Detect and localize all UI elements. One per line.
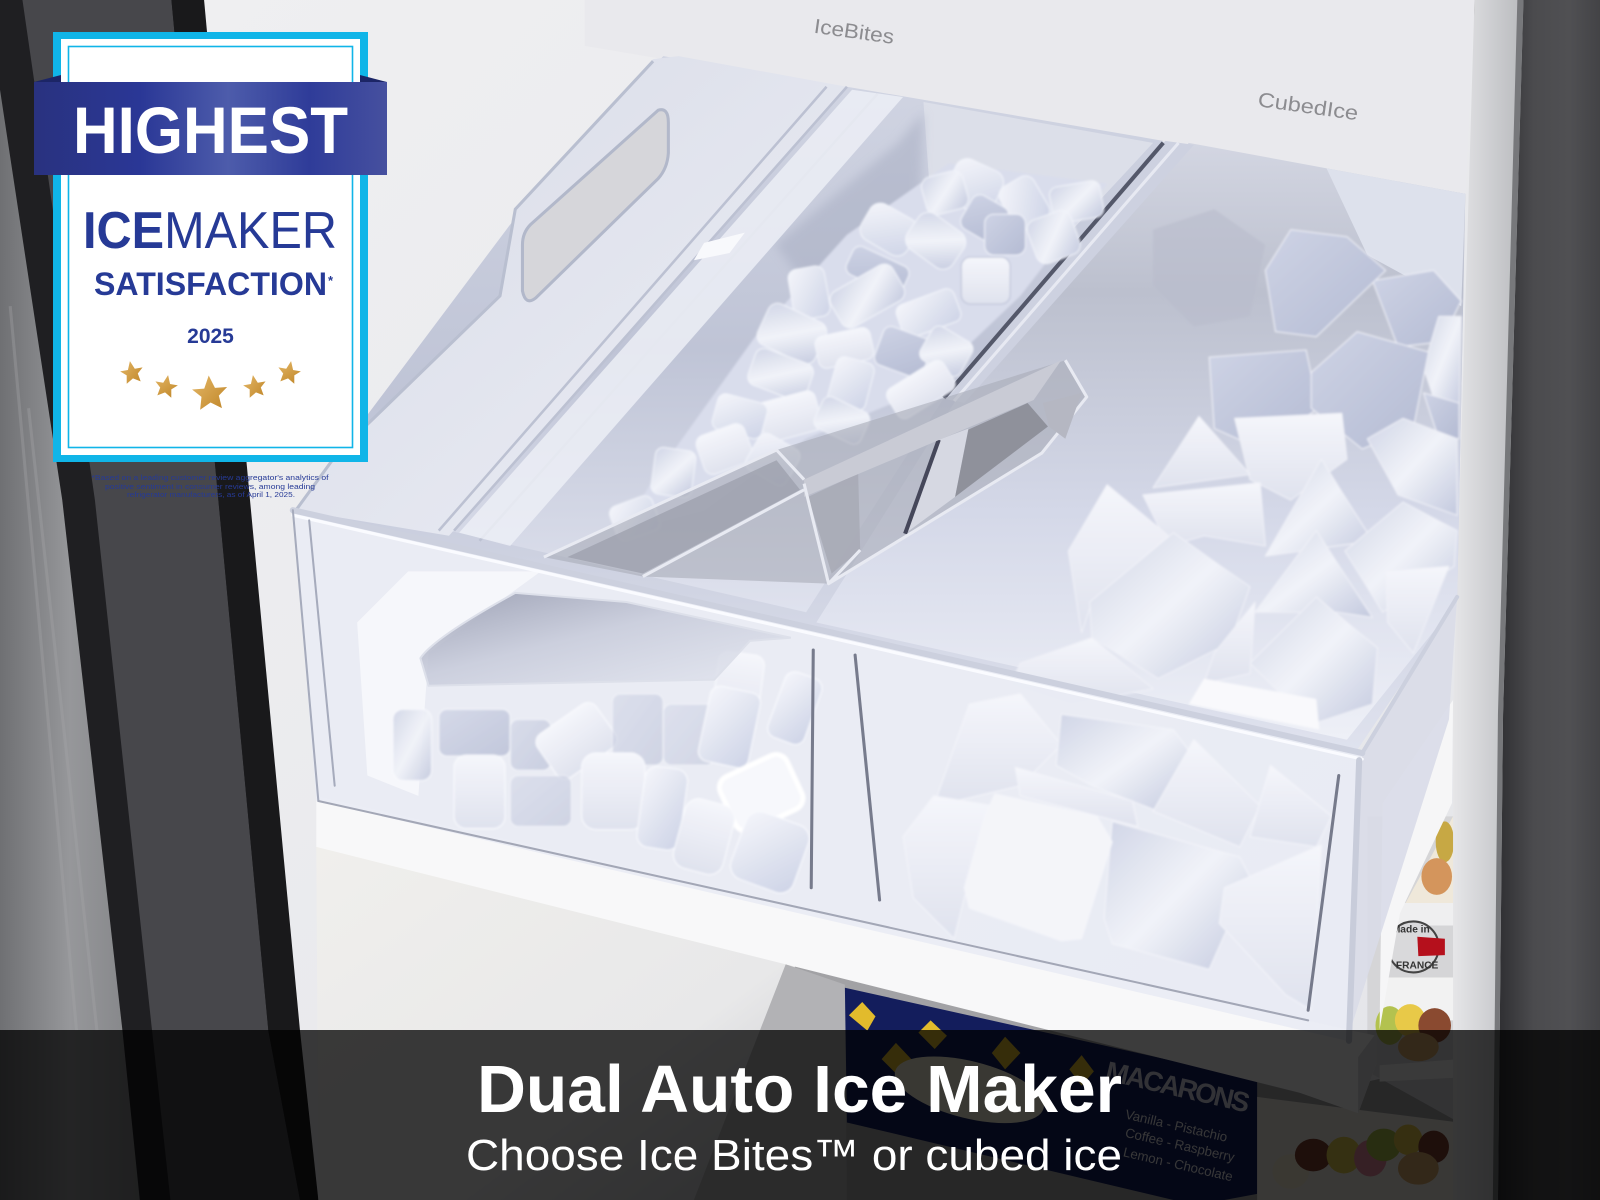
badge card: [53, 32, 368, 462]
made in France seal: Made in: [1392, 925, 1430, 936]
box flavours: Lemon - Chocolate: [1122, 1144, 1234, 1184]
label: Cubed Ice: CubedIce: [1256, 89, 1360, 125]
asterisk: *: [328, 273, 334, 288]
bin rim and edges: [293, 510, 1457, 1041]
ribbon: highest: HIGHEST: [73, 93, 348, 167]
ice bites pile, lower: [393, 650, 825, 897]
ice scoop handle: [544, 360, 1087, 584]
made in France seal: FRANCE: [1396, 960, 1439, 971]
footnote: positive sentiment in consumer reviews, among leading: [105, 482, 315, 491]
heading: ice maker: ICEMAKER: [83, 202, 337, 260]
lower compartment under shelf: [316, 845, 1459, 1200]
ice dispenser panel: [585, 0, 1474, 194]
bin back: [296, 56, 1465, 750]
ice cubes pile, lower: [903, 694, 1332, 1010]
caption subtitle: Choose Ice Bites™ or cubed ice: [466, 1131, 1122, 1180]
box label: Macarons: MACARONS: [1103, 1055, 1255, 1119]
ice bin: [293, 56, 1465, 1041]
fridge interior liner: [204, 0, 1474, 1200]
label: Ice Bites: IceBites: [813, 16, 895, 49]
box flavours: [1122, 1107, 1236, 1184]
caption title: Dual Auto Ice Maker: [477, 1052, 1122, 1127]
door bin at right: [1367, 700, 1459, 1122]
door bin white wall: [1380, 700, 1453, 1030]
ice bites pile, upper: [607, 155, 1107, 543]
divider between compartments: [941, 141, 1194, 403]
made in France seal: [1388, 921, 1445, 972]
macaron upper shelf: [1400, 816, 1459, 913]
footnote: refrigerator manufacturers, as of April 1, 2025.: [127, 490, 295, 499]
caption bar: [0, 1030, 1600, 1200]
bin left wall: [296, 56, 903, 546]
shelf under ice bin: [316, 796, 1377, 1113]
box flavours: Vanilla - Pistachio: [1124, 1107, 1229, 1145]
left door: [0, 0, 327, 1200]
bin front face: [293, 510, 1457, 1041]
heading: satisfaction: SATISFACTION: [94, 266, 327, 302]
macarons on door shelf: [1375, 1004, 1459, 1082]
macaron tray: [1257, 1097, 1459, 1200]
rating stars: [119, 359, 302, 410]
bin handle cutout: [522, 110, 668, 301]
footnote: [92, 473, 330, 499]
year: 2025: [187, 325, 234, 348]
award badge: [34, 32, 387, 499]
ice bites compartment floor: [449, 87, 1163, 612]
ice cubes pile, upper: [1010, 209, 1461, 730]
footnote: *Based on a leading customer review aggregator's analytics of: [92, 473, 330, 482]
cubed ice compartment floor: [816, 143, 1465, 740]
ice scoop blade: [420, 593, 791, 686]
box flavours: Coffee - Raspberry: [1124, 1125, 1236, 1165]
right door: [1453, 0, 1600, 1200]
macaron box: [845, 988, 1257, 1200]
ribbon: highest: [34, 75, 387, 175]
